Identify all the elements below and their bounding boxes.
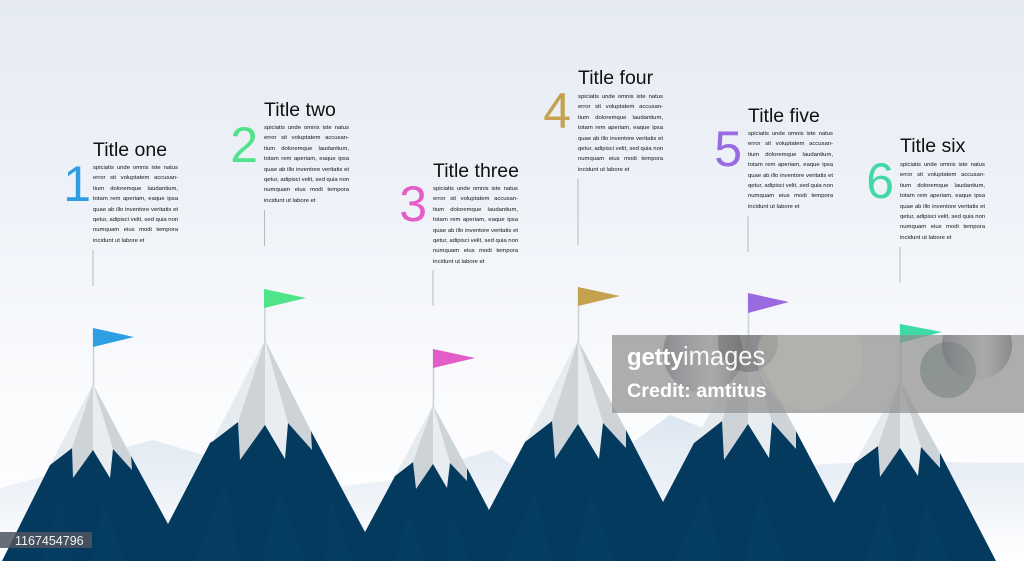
step 6: number, title and text: error sit voluptatem accusan-: [900, 172, 985, 178]
step 1: number, title and text: qetur, adipisci velit, sed quia non: [93, 217, 178, 223]
step 2: number, title and text: quae ab illo inventore veritatis et: [264, 167, 349, 173]
flag poles: [94, 287, 900, 407]
mountain 1 snow cap: [50, 384, 132, 478]
watermark banner: images: [683, 343, 765, 371]
step 2: number, title and text: numquam eius modi tempora: [264, 187, 349, 193]
step 3: number, title and text: qetur, adipisci velit, sed quia non: [433, 238, 518, 244]
step 3: number, title and text: spiciatis unde omnis iste natus: [433, 186, 518, 192]
step 2: number, title and text: incidunt ut labore et: [264, 198, 315, 204]
flag 3: [433, 349, 475, 368]
step 2: number, title and text: error sit voluptatem accusan-: [264, 135, 349, 141]
step 3: number, title and text: incidunt ut labore et: [433, 259, 484, 265]
watermark banner: getty: [627, 344, 684, 371]
image id badge: 1167454796: [15, 534, 84, 548]
step 2: number, title and text: qetur, adipisci velit, sed quia non: [264, 177, 349, 183]
step 1: number, title and text: [63, 139, 178, 244]
step 5: number, title and text: numquam eius modi tempora: [748, 193, 833, 199]
flag 6: [900, 324, 942, 343]
image id badge: [0, 532, 92, 548]
step 6: number, title and text: [866, 135, 985, 241]
step 1: number, title and text: numquam eius modi tempora: [93, 227, 178, 233]
step 6: number, title and text: spiciatis unde omnis iste natus: [900, 162, 985, 168]
step 5: number, title and text: quae ab illo inventore veritatis et: [748, 173, 833, 179]
step 5: number, title and text: spiciatis unde omnis iste natus: [748, 131, 833, 137]
step 5: number, title and text: 5: [714, 121, 742, 177]
step 6: number, title and text: incidunt ut labore et: [900, 235, 951, 241]
mountain facets: [42, 480, 950, 561]
mountain range silhouette: [2, 421, 996, 561]
step 5: number, title and text: incidunt ut labore et: [748, 204, 799, 210]
mountain 3 snow cap: [395, 405, 467, 489]
step 1: number, title and text: incidunt ut labore et: [93, 238, 144, 244]
step 3: number, title and text: 3: [399, 176, 427, 232]
step 4: number, title and text: Title four: [578, 67, 653, 89]
mountain 6 snow cap: [855, 381, 940, 477]
step 6: number, title and text: quae ab illo inventore veritatis et: [900, 204, 985, 210]
step 5: number, title and text: tium doloremque laudantium,: [748, 152, 833, 158]
step 6: number, title and text: tium doloremque laudantium,: [900, 183, 985, 189]
step 4: number, title and text: totam rem aperiam, eaque ipsa: [578, 125, 663, 131]
step 2: number, title and text: [230, 99, 349, 204]
step 1: number, title and text: error sit voluptatem accusan-: [93, 175, 178, 181]
step 3: number, title and text: tium doloremque laudantium,: [433, 207, 518, 213]
step 2: number, title and text: Title two: [264, 99, 336, 121]
mountain 4 snow cap: [525, 340, 626, 459]
step 3: number, title and text: totam rem aperiam, eaque ipsa: [433, 217, 518, 223]
step 4: number, title and text: incidunt ut labore et: [578, 167, 629, 173]
step 2: number, title and text: spiciatis unde omnis iste natus: [264, 125, 349, 131]
step 1: number, title and text: quae ab illo inventore veritatis et: [93, 207, 178, 213]
flag 1: [93, 328, 134, 347]
step 4: number, title and text: 4: [543, 83, 571, 139]
step 4: number, title and text: spiciatis unde omnis iste natus: [578, 94, 663, 100]
step 3: number, title and text: Title three: [433, 160, 519, 182]
step 4: number, title and text: quae ab illo inventore veritatis et: [578, 136, 663, 142]
watermark banner: [0, 335, 1024, 548]
step 5: number, title and text: [714, 105, 833, 210]
step 6: number, title and text: 6: [866, 153, 894, 209]
step 2: number, title and text: 2: [230, 117, 258, 173]
step 3: number, title and text: quae ab illo inventore veritatis et: [433, 228, 518, 234]
step 6: number, title and text: totam rem aperiam, eaque ipsa: [900, 193, 985, 199]
step 6: number, title and text: qetur, adipisci velit, sed quia non: [900, 214, 985, 220]
step 3: number, title and text: [399, 160, 519, 265]
step 5: number, title and text: Title five: [748, 105, 820, 127]
step 1: number, title and text: Title one: [93, 139, 167, 161]
step 4: number, title and text: numquam eius modi tempora: [578, 156, 663, 162]
flag 2: [264, 289, 306, 308]
mountain 2 snow cap: [212, 340, 312, 460]
step 4: number, title and text: [543, 67, 663, 173]
mountain 5 snow cap: [694, 340, 796, 460]
connector lines: [93, 179, 900, 306]
step 4: number, title and text: error sit voluptatem accusan-: [578, 104, 663, 110]
step 2: number, title and text: totam rem aperiam, eaque ipsa: [264, 156, 349, 162]
step 5: number, title and text: error sit voluptatem accusan-: [748, 141, 833, 147]
step 1: number, title and text: spiciatis unde omnis iste natus: [93, 165, 178, 171]
flag 5: [748, 293, 789, 313]
watermark banner: Credit: amtitus: [627, 380, 767, 402]
distant hills: [0, 415, 1024, 561]
step 6: number, title and text: Title six: [900, 135, 965, 157]
step 6: number, title and text: numquam eius modi tempora: [900, 224, 985, 230]
step 3: number, title and text: error sit voluptatem accusan-: [433, 196, 518, 202]
step 1: number, title and text: 1: [63, 156, 91, 212]
step 3: number, title and text: numquam eius modi tempora: [433, 248, 518, 254]
step 1: number, title and text: tium doloremque laudantium,: [93, 186, 178, 192]
step 4: number, title and text: tium doloremque laudantium,: [578, 115, 663, 121]
step 1: number, title and text: totam rem aperiam, eaque ipsa: [93, 196, 178, 202]
step 2: number, title and text: tium doloremque laudantium,: [264, 146, 349, 152]
step 5: number, title and text: qetur, adipisci velit, sed quia non: [748, 183, 833, 189]
step 5: number, title and text: totam rem aperiam, eaque ipsa: [748, 162, 833, 168]
step 4: number, title and text: qetur, adipisci velit, sed quia non: [578, 146, 663, 152]
flag 4: [578, 287, 620, 306]
